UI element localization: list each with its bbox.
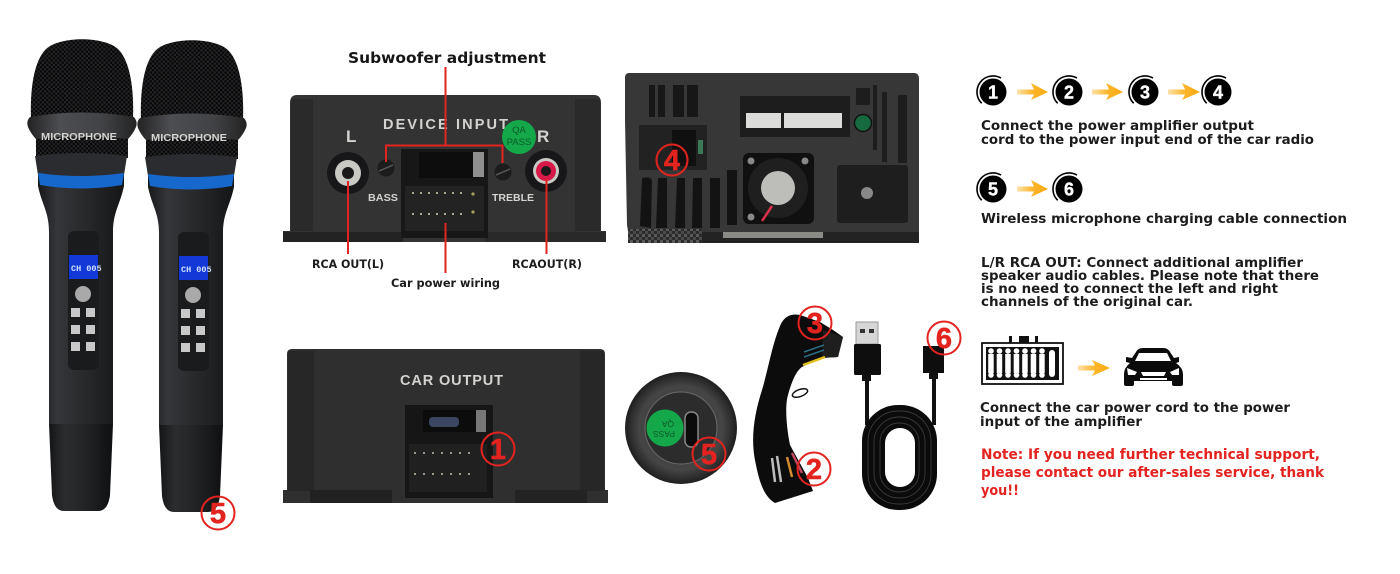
marker 6: 6	[936, 323, 952, 355]
bass screw	[378, 160, 394, 176]
step 4	[1202, 76, 1232, 106]
text: car power cord: input of the amplifier	[980, 414, 1142, 430]
step 1: 1	[988, 82, 998, 102]
icon: car	[1124, 348, 1183, 386]
marker 1: 1	[490, 434, 506, 466]
marker 2	[798, 452, 830, 486]
RCA R jack	[525, 150, 567, 192]
step 3: 3	[1140, 82, 1150, 102]
device input amplifier panel	[283, 95, 606, 242]
arrow	[1017, 180, 1048, 197]
marker 5 on microphone: 5	[210, 498, 226, 530]
car output amplifier panel	[283, 349, 608, 503]
port	[685, 412, 698, 447]
USB plug	[854, 322, 881, 381]
step 1	[977, 76, 1006, 106]
marker 5 on port: 5	[701, 439, 717, 471]
text: L/R RCA OUT: channels of the original car.	[981, 294, 1193, 310]
car radio back panel	[625, 73, 919, 243]
device input label: DEVICE INPUT	[383, 117, 508, 133]
QA pass sticker	[502, 120, 536, 154]
marker 3: 3	[807, 308, 823, 340]
arrow	[1168, 83, 1200, 100]
arrow: connector to car	[1078, 360, 1110, 376]
cooling fan	[743, 153, 814, 224]
RCA L jack	[327, 152, 369, 194]
mounting recess	[837, 165, 908, 223]
QA sticker: QA	[662, 419, 674, 429]
QA sticker: PASS	[653, 429, 675, 439]
callout lines: subwoofer adjustment	[386, 67, 502, 163]
text: car power cord: Connect the car power cord to the power	[980, 400, 1290, 416]
note: after-sales support: you!!	[981, 483, 1019, 499]
icon: power connector	[982, 336, 1063, 384]
note: after-sales support: Note: If you need further technical support,	[981, 447, 1320, 463]
connector recess	[639, 125, 707, 170]
step 6: 6	[1064, 180, 1074, 200]
top left fins	[649, 85, 698, 117]
car output label: CAR OUTPUT	[400, 373, 503, 389]
L label: L	[346, 127, 356, 146]
cable stems	[867, 378, 934, 425]
marker 5 on port	[692, 438, 726, 471]
steps 5 to 6	[977, 173, 1082, 202]
microphone left: CH 005	[71, 264, 102, 274]
R label: R	[537, 127, 549, 146]
microphone right: CH 005	[181, 265, 212, 275]
microphone right	[137, 40, 247, 512]
text: L/R RCA OUT: L/R RCA OUT: Connect additional amplifier	[981, 255, 1303, 271]
step 3	[1129, 76, 1158, 106]
text: L/R RCA OUT	[981, 255, 1319, 310]
QA pass sticker: PASS	[507, 137, 531, 148]
step 4: 4	[1213, 82, 1223, 102]
text: power amplifier output: cord to the power input end of the car radio	[981, 132, 1314, 148]
treble label: TREBLE	[492, 193, 534, 204]
callout line: car power	[444, 223, 446, 273]
barcode strip	[723, 232, 823, 238]
microphone left: MICROPHONE	[41, 131, 117, 143]
heading: subwoofer adjustment: Subwoofer adjustment	[348, 49, 547, 67]
QA sticker	[646, 410, 684, 446]
note: after-sales support: please contact our after-sales service, thank	[981, 465, 1324, 481]
marker 2: 2	[806, 454, 822, 486]
callout line: RCA L	[347, 181, 349, 254]
treble screw	[494, 164, 512, 180]
text: L/R RCA OUT: is no need to connect the left and right	[981, 281, 1279, 297]
marker 4: 4	[664, 145, 680, 177]
USB-C charging port	[625, 372, 737, 484]
steps 1 to 4	[977, 76, 1232, 106]
label: RCA OUT R: RCAOUT(R)	[512, 257, 582, 271]
text: power amplifier output: Connect the power amplifier output	[981, 118, 1255, 134]
marker 4	[656, 144, 688, 177]
microphone left	[27, 39, 137, 511]
wiring harness	[753, 314, 843, 503]
center connector recess	[740, 96, 850, 137]
label: car power wiring: Car power wiring	[391, 276, 500, 290]
callout line: RCA R	[546, 179, 548, 254]
marker 3	[798, 306, 832, 340]
arrow	[1092, 83, 1123, 100]
bottom left fins	[640, 170, 737, 228]
text: car power cord	[980, 400, 1290, 430]
USB charging cable	[854, 322, 944, 510]
marker 5 on microphone	[202, 496, 234, 530]
connector	[401, 149, 488, 238]
connector	[405, 405, 493, 498]
marker 1	[482, 432, 514, 466]
bottom wires	[772, 456, 781, 482]
label: RCA OUT L: RCA OUT(L)	[312, 257, 384, 271]
microphone right: MICROPHONE	[151, 132, 227, 144]
top wires	[804, 345, 824, 357]
step 2	[1053, 76, 1082, 106]
arrow	[1017, 83, 1048, 100]
micro plug	[923, 346, 944, 373]
top connector	[822, 330, 843, 358]
step 2: 2	[1064, 82, 1074, 102]
top right fins	[856, 85, 907, 163]
text: wireless microphone charging: Wireless microphone charging cable connection	[981, 211, 1347, 227]
marker 6	[928, 322, 960, 355]
text: L/R RCA OUT: speaker audio cables. Please note that there	[981, 268, 1319, 284]
note: after-sales support	[981, 447, 1324, 499]
step 5: 5	[988, 180, 998, 200]
green sticker	[854, 114, 872, 132]
bass label: BASS	[368, 193, 398, 204]
coil	[862, 405, 937, 510]
QA pass sticker: QA	[512, 125, 527, 136]
text: power amplifier output	[981, 118, 1314, 148]
